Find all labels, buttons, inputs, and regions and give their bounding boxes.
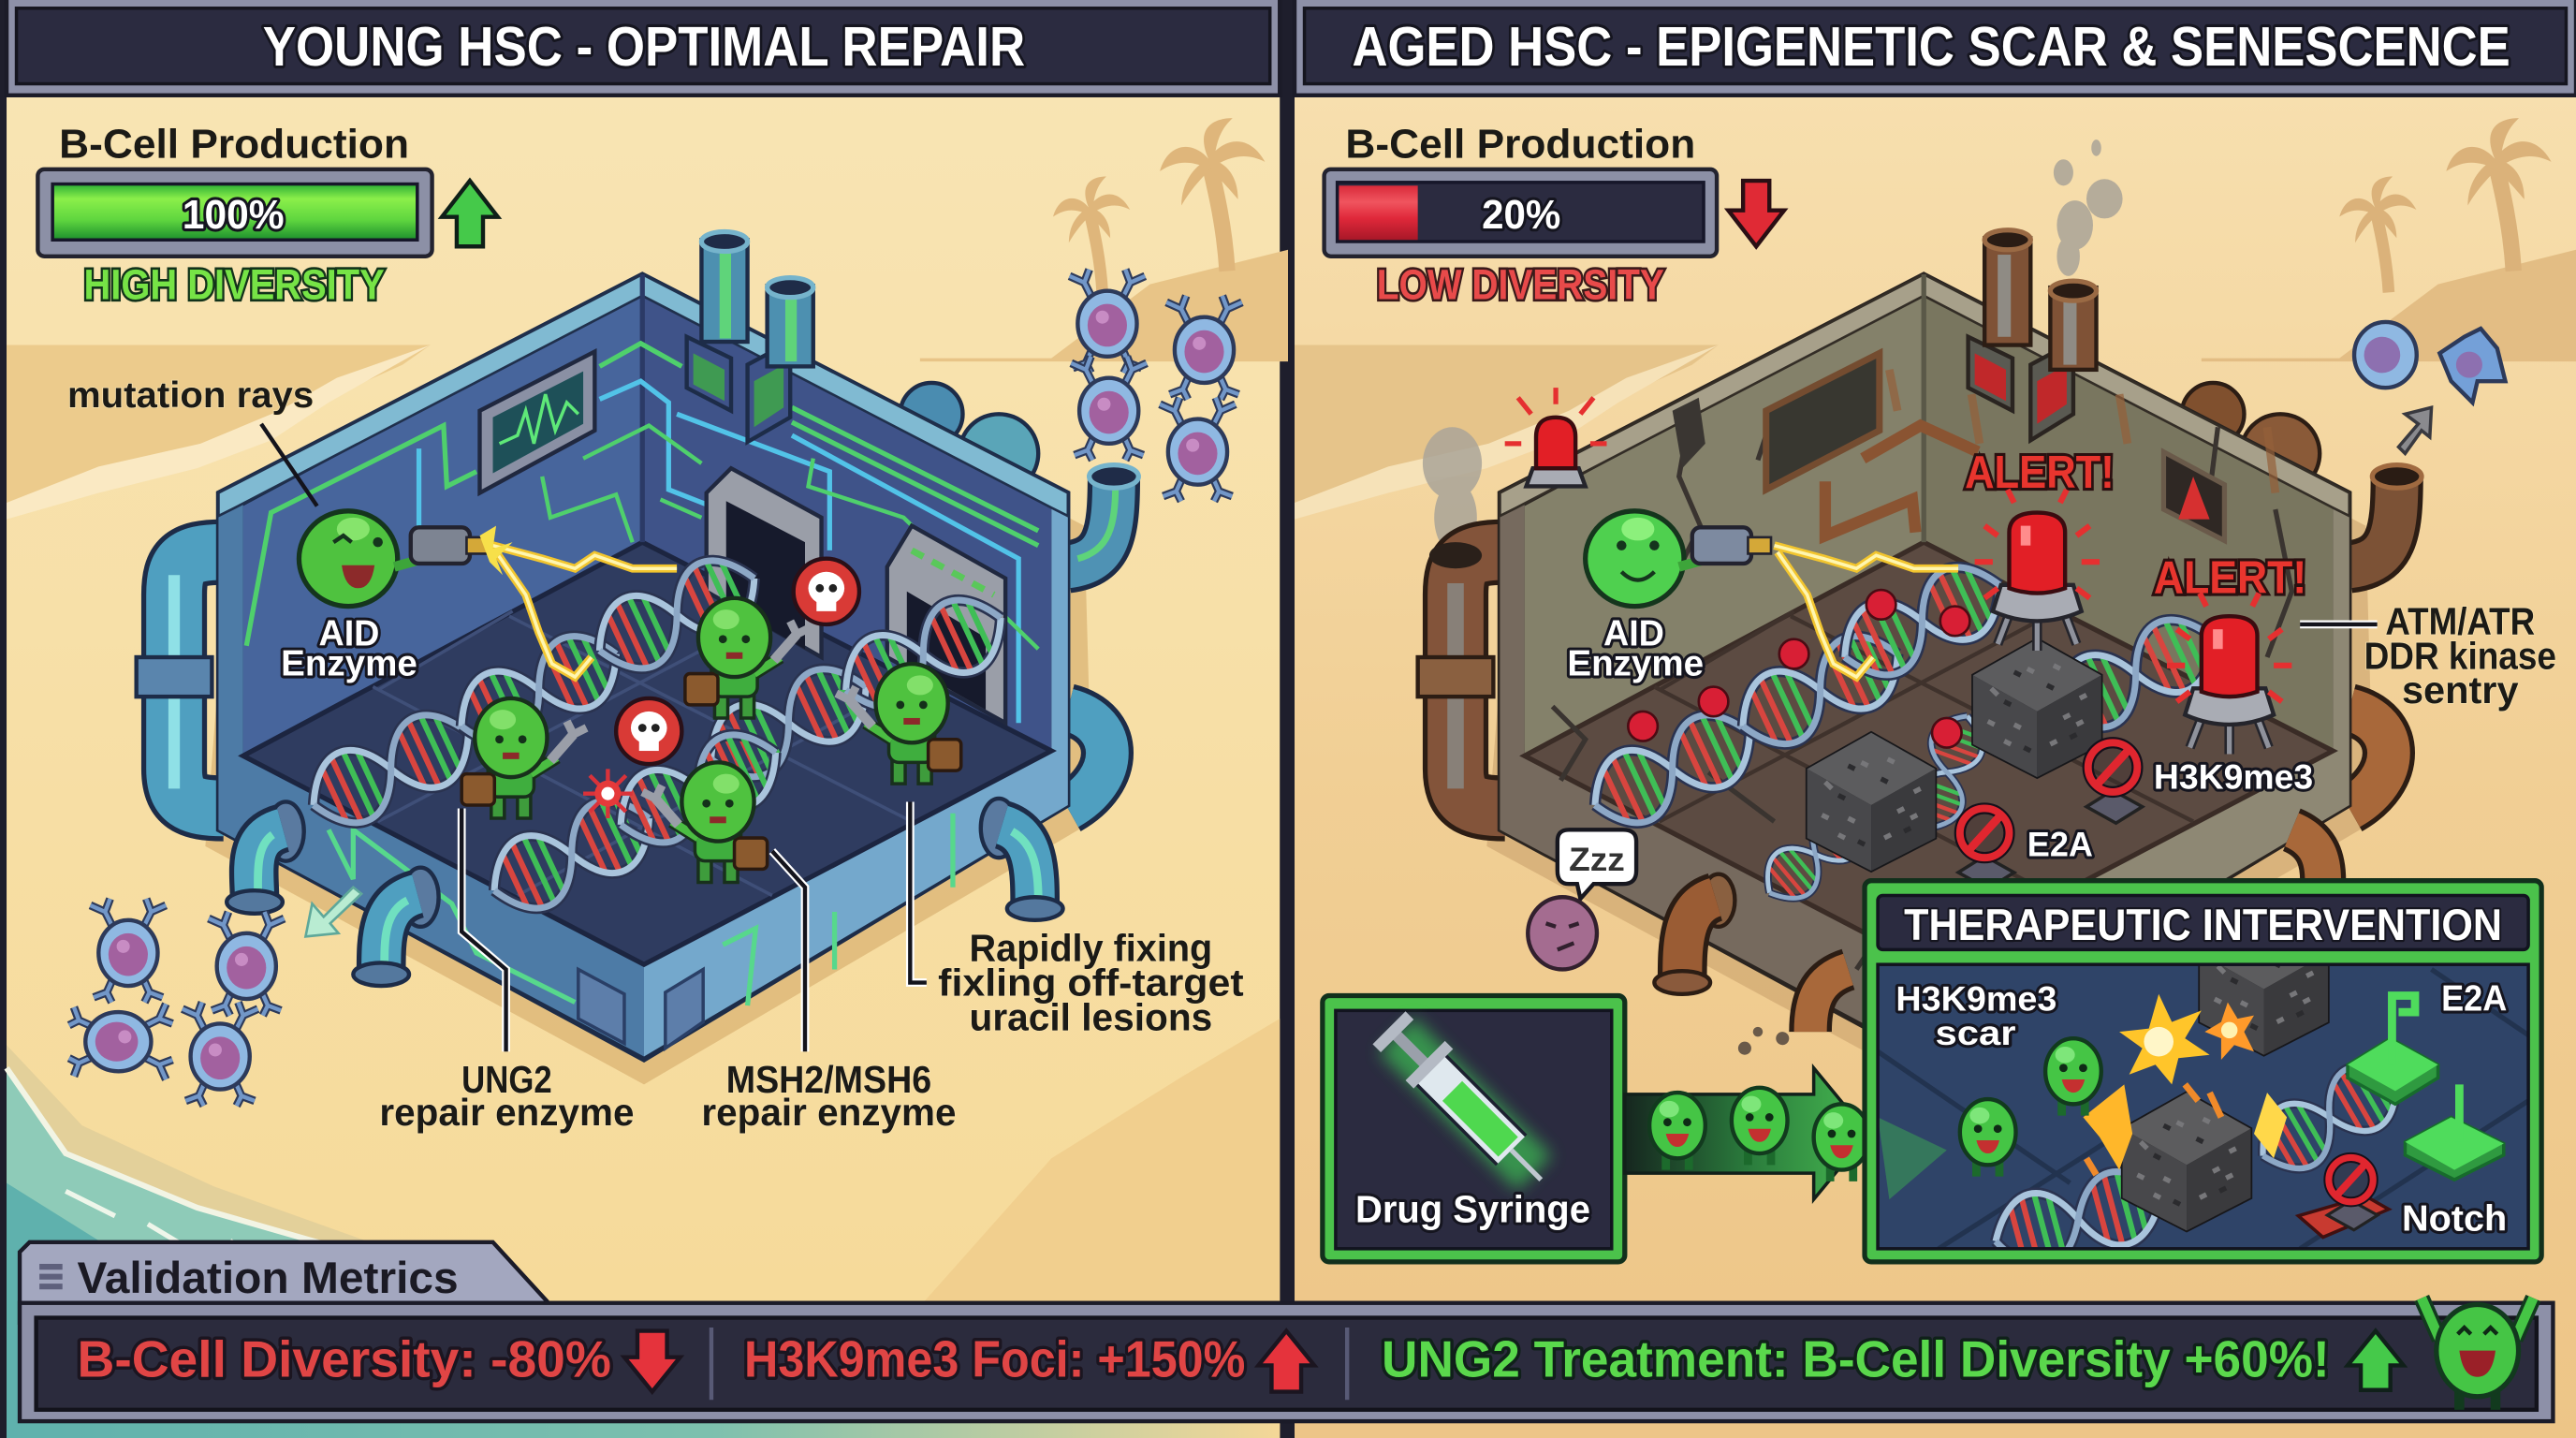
- label: AID enzyme: [281, 614, 417, 683]
- labels in scene: Notch: [2402, 1199, 2507, 1240]
- callout: rapidly fixing: [910, 801, 1244, 1038]
- callout: MSH2/MSH6: repair enzyme: [701, 1091, 956, 1134]
- DNA strands: [298, 545, 1017, 924]
- pipe: left loop: [137, 552, 224, 808]
- building walls and floor: [1500, 274, 2349, 1060]
- title bar: aged HSC: [1295, 0, 2576, 95]
- B-cell production gauge: [1325, 121, 1784, 308]
- epigenetic marks on DNA: [1628, 590, 1969, 748]
- label: AID enzyme: Enzyme: [1567, 643, 1704, 683]
- icon: palm trees: [1053, 118, 1265, 292]
- callout: rapidly fixing: fixling off-target: [938, 961, 1244, 1005]
- broken monitor: [1766, 353, 1880, 490]
- silenced gene: H3K9me3: H3K9me3: [2154, 757, 2313, 796]
- header: therapeutic intervention: THERAPEUTIC INTERVENTION: [1904, 901, 2502, 950]
- silenced gene: E2A: E2A: [2027, 825, 2093, 863]
- labels in scene: [1895, 978, 2507, 1240]
- icon: syringe: [1377, 1016, 1541, 1180]
- callout: MSH2/MSH6: MSH2/MSH6: [726, 1058, 931, 1101]
- metric: H3K9me3 foci: H3K9me3 Foci: +150%: [744, 1331, 1245, 1388]
- chimneys: [687, 231, 813, 442]
- icon: down arrow: [1728, 181, 1784, 246]
- heading: B-Cell Production: B-Cell Production: [59, 121, 409, 167]
- panel: therapeutic intervention: [1865, 881, 2541, 1277]
- icon: palm trees: [2339, 118, 2552, 292]
- callout: UNG2: repair enzyme: [379, 1091, 634, 1134]
- pipe: rusty right elbow: [2349, 465, 2422, 808]
- AID enzyme with ray gun: [299, 511, 490, 607]
- progress bar: [37, 169, 432, 257]
- callout: MSH2/MSH6: [701, 851, 956, 1134]
- title bar: young HSC: YOUNG HSC - OPTIMAL REPAIR: [263, 15, 1025, 78]
- label: drug syringe: Drug Syringe: [1355, 1188, 1590, 1231]
- alert: DDR sentry one: ALERT!: [1965, 448, 2115, 498]
- smoke: [1423, 139, 2123, 553]
- icon: arrow from facility to B cells: [305, 888, 361, 936]
- tab: validation metrics: Validation Metrics: [77, 1254, 459, 1303]
- icons: B cells top right: [1070, 270, 1242, 501]
- facility: healthy isometric factory: [137, 231, 1138, 1084]
- senescent cell with Zzz bubble: [1528, 829, 1636, 969]
- label: AID enzyme: AID: [1603, 614, 1664, 654]
- callout: mutation rays: mutation rays: [67, 375, 314, 416]
- chimneys with red panels: [1969, 230, 2097, 440]
- progress bar: 20%: [1482, 192, 1560, 238]
- tab: validation metrics: [20, 1242, 547, 1323]
- doors: [707, 468, 1005, 723]
- silenced gene: H3K9me3: [2086, 742, 2313, 823]
- AID enzyme with ray gun: [1586, 511, 1771, 607]
- labels in scene: scar: [1936, 1014, 2016, 1052]
- senescent cell with Zzz bubble: Zzz: [1569, 842, 1625, 878]
- repair enzymes: [461, 598, 961, 884]
- pipe: right elbow: [1068, 465, 1138, 808]
- callout: ATM/ATR sentry: [2300, 599, 2556, 712]
- panel: young HSC: [7, 92, 1288, 1438]
- background: faded beach scene: [1295, 92, 2576, 1438]
- label: high diversity: HIGH DIVERSITY: [84, 260, 385, 308]
- mutation rays lightning: [479, 526, 677, 677]
- building walls and floor: [218, 274, 1068, 1060]
- epigenetic scar stone blocks: [1808, 639, 2101, 871]
- mascot: cheering enzyme: [2422, 1298, 2533, 1410]
- progress bar: [1325, 169, 1717, 257]
- callout: ATM/ATR sentry: ATM/ATR: [2385, 599, 2535, 642]
- scene: scar removal: [1880, 966, 2527, 1247]
- mutation rays lightning: [1775, 546, 1958, 677]
- silenced gene: E2A: [1958, 808, 2093, 888]
- panel: drug syringe: [1323, 996, 1625, 1262]
- labels in scene: E2A: [2441, 978, 2507, 1019]
- monitor: [479, 352, 594, 493]
- alert: DDR sentry two: ALERT!: [2154, 553, 2306, 604]
- callout: ATM/ATR sentry: DDR kinase: [2364, 634, 2556, 677]
- title bar: young HSC: [7, 0, 1280, 95]
- callout: ATM/ATR sentry: sentry: [2402, 668, 2519, 712]
- icons: B cells bottom left: [69, 899, 285, 1106]
- alert beacon: wall: [1505, 388, 1606, 486]
- metric: UNG2 treatment: UNG2 Treatment: B-Cell Diversity +60%!: [1382, 1331, 2330, 1388]
- wall alert sign: [2163, 452, 2224, 540]
- background: beach scene: [7, 92, 1288, 1438]
- callout: UNG2: UNG2: [461, 1058, 552, 1101]
- icon: up arrow: [442, 181, 498, 246]
- label: AID enzyme: [1567, 614, 1704, 683]
- progress bar: 100%: [183, 192, 285, 238]
- lesion skull markers: [583, 559, 859, 818]
- arrow: treatment flow with enzymes: [1625, 1068, 1869, 1199]
- label: AID enzyme: Enzyme: [281, 643, 417, 683]
- B-cell production gauge: [37, 121, 498, 308]
- pipes: base outlets: [227, 799, 1063, 986]
- footer strip under metrics: [7, 1423, 1280, 1438]
- callout: rapidly fixing: Rapidly fixing: [970, 927, 1212, 970]
- pipe: rusty left loop: [1418, 542, 1505, 808]
- alert: DDR sentry one: [1965, 448, 2115, 651]
- callout: mutation rays: [67, 375, 317, 506]
- metric: B-cell diversity: B-Cell Diversity: -80%: [77, 1331, 611, 1388]
- callout: UNG2: [379, 808, 634, 1134]
- callout: rapidly fixing: uracil lesions: [970, 995, 1212, 1038]
- facility: decayed isometric factory: [1323, 230, 2556, 1277]
- label: low diversity: LOW DIVERSITY: [1377, 260, 1664, 308]
- panel: validation metrics: [20, 1242, 2553, 1421]
- rusty base pipes: [1654, 829, 2323, 1055]
- DNA strands damaged: [1579, 551, 2229, 913]
- alert: DDR sentry two: [2154, 553, 2306, 755]
- metrics bar: [20, 1303, 2553, 1421]
- labels in scene: H3K9me3: [1895, 979, 2056, 1018]
- label: AID enzyme: AID: [318, 614, 379, 654]
- icons: senescent B cells and arrow: [2354, 322, 2506, 453]
- heading: B-Cell Production: B-Cell Production: [1345, 121, 1695, 167]
